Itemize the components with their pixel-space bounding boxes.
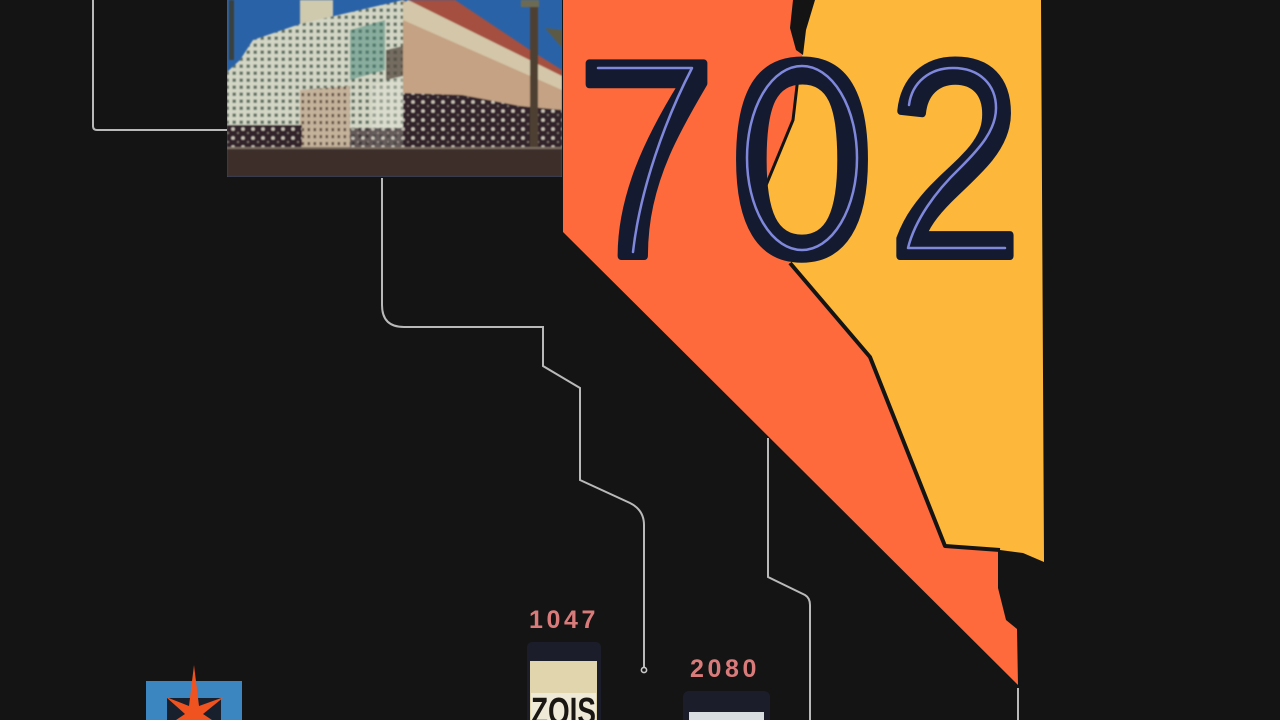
big number: 702: 2	[888, 4, 1022, 316]
phone: 1047	[527, 642, 601, 720]
year label: 1047: 1047	[529, 606, 599, 634]
big number: 702	[576, 3, 1022, 316]
photo: building	[227, 0, 562, 177]
connector line: photo to phone marker	[382, 178, 644, 668]
number inline highlight	[598, 66, 1005, 252]
map: dark border between regions	[762, 0, 1000, 550]
connector line: top left to photo	[93, 0, 227, 130]
big number: 702: 0	[730, 3, 874, 316]
big number: 702: 7	[576, 4, 716, 316]
phone: 2080	[683, 691, 770, 720]
year label: 2080: 2080	[690, 655, 760, 683]
connector marker dot	[641, 667, 647, 673]
map: orange region	[563, 0, 1018, 685]
connector line: map to second phone	[768, 438, 810, 720]
map: yellow region	[763, 0, 1044, 562]
icon: orange star on blue badge	[146, 665, 242, 720]
connector line: map tip downward	[1017, 688, 1019, 720]
